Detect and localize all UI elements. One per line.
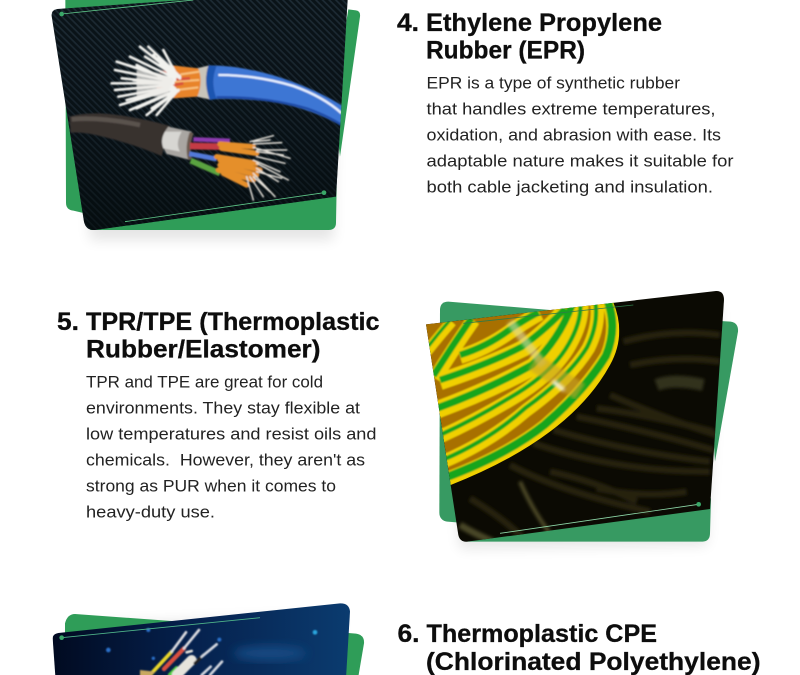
accent line top xyxy=(59,618,260,640)
glowing dots xyxy=(106,628,317,661)
text block: section 5 body: environments. They stay flexible at xyxy=(86,400,360,418)
dark carbon photo card xyxy=(40,0,360,233)
panel: TPR/TPE wire coil image xyxy=(423,288,738,548)
heading: section 6: 6. xyxy=(398,620,420,648)
blue starfield photo card xyxy=(50,602,353,675)
dark wire photo card xyxy=(423,288,727,545)
accent line top xyxy=(59,0,193,16)
green backing shapes xyxy=(65,0,360,230)
text block: section 4 body: both cable jacketing and insulation. xyxy=(426,178,713,196)
heading: section 4: Rubber (EPR) xyxy=(426,36,585,64)
heading: section 6 xyxy=(398,620,760,675)
heading: section 5: Rubber/Elastomer) xyxy=(86,336,320,364)
dark coiled strands xyxy=(460,333,720,542)
text block: section 5 body: strong as PUR when it comes to xyxy=(86,478,336,496)
text block: section 5 body: low temperatures and resist oils and xyxy=(86,426,376,444)
panel: CPE cable image xyxy=(50,602,364,675)
text block: section 4 body xyxy=(426,74,734,196)
icon: blue fibre cable xyxy=(112,47,345,128)
text block: section 5 body: chemicals. However, they aren't as xyxy=(86,452,365,470)
heading: section 5: 5. xyxy=(57,308,79,336)
clear cable tie xyxy=(510,322,580,392)
heading: section 6: Thermoplastic CPE xyxy=(426,620,657,648)
text block: section 5 body: heavy-duty use. xyxy=(86,504,215,522)
icon: black multi-core cable xyxy=(69,113,290,200)
accent line top xyxy=(463,305,633,323)
icon: stripped cable wires xyxy=(140,630,222,675)
text block: section 4 body: that handles extreme temperatures, xyxy=(426,100,716,118)
text block: section 4 body: oxidation, and abrasion with ease. Its xyxy=(426,126,721,144)
text block: section 4 body: adaptable nature makes it suitable for xyxy=(426,152,734,170)
heading: section 4: Ethylene Propylene xyxy=(426,9,662,37)
text block: section 5 body: TPR and TPE are great for cold xyxy=(86,374,323,392)
yellow and green coil xyxy=(426,302,620,485)
heading: section 4: 4. xyxy=(397,9,419,37)
heading: section 5: TPR/TPE (Thermoplastic xyxy=(86,308,380,336)
accent line bottom xyxy=(500,502,701,533)
text block: section 5 body xyxy=(86,374,376,522)
panel: EPR cable image xyxy=(40,0,360,240)
heading: section 4 xyxy=(397,9,662,64)
accent line bottom xyxy=(125,190,326,222)
text block: section 4 body: EPR is a type of synthetic rubber xyxy=(426,74,681,92)
green backing shapes xyxy=(65,614,364,675)
heading: section 5 xyxy=(57,308,380,364)
green backing shapes xyxy=(439,302,738,542)
